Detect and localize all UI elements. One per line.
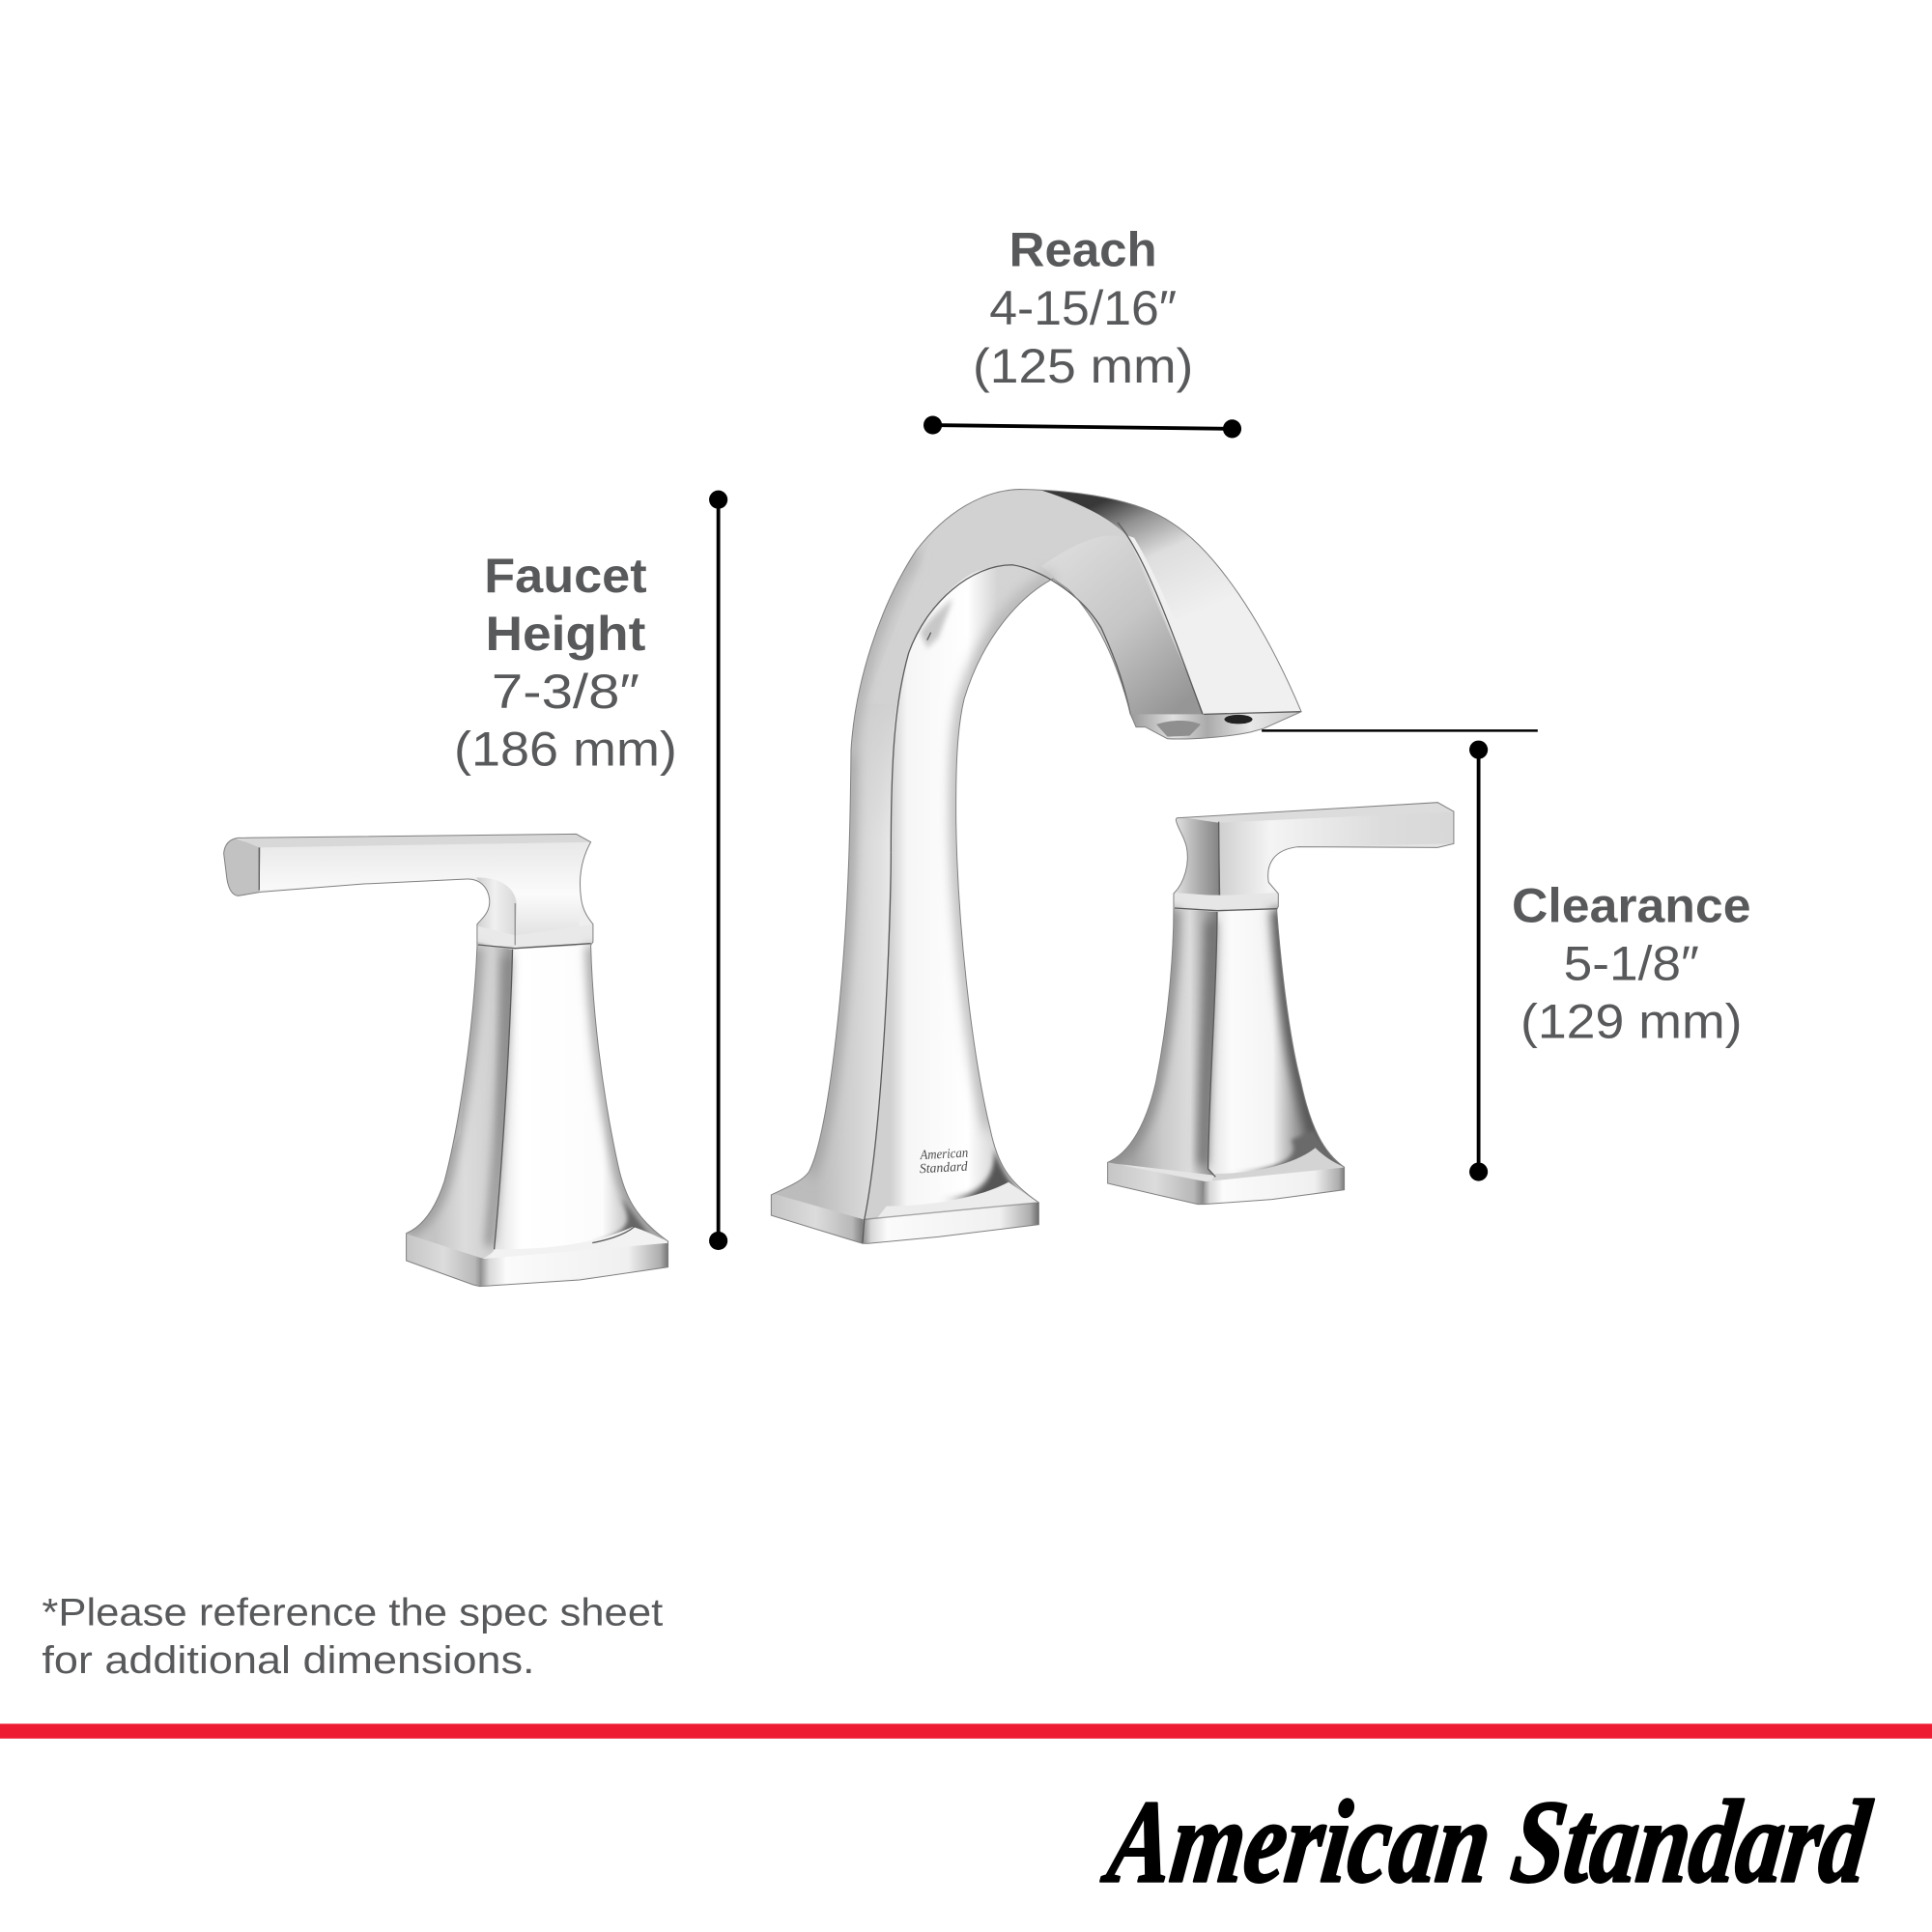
text block: footnote: *Please reference the spec sheet xyxy=(42,1591,663,1634)
heading: clearance dimension: 5-1/8″ xyxy=(1564,937,1699,991)
icon: left handle xyxy=(222,834,669,1288)
heading: faucet height dimension: 7-3/8″ xyxy=(492,665,639,719)
icon: small brand mark on spout: American xyxy=(919,1146,969,1163)
arrow: reach dimension line xyxy=(923,415,1241,438)
heading: clearance dimension: (129 mm) xyxy=(1520,995,1743,1049)
text block: footnote xyxy=(42,1591,663,1682)
heading: faucet height dimension: (186 mm) xyxy=(454,723,677,777)
icon: small brand mark on spout xyxy=(919,1146,969,1177)
heading: clearance dimension: Clearance xyxy=(1512,879,1750,933)
heading: reach dimension xyxy=(973,223,1193,393)
heading: faucet height dimension: Faucet xyxy=(484,549,647,603)
heading: reach dimension: (125 mm) xyxy=(973,339,1193,393)
heading: clearance dimension xyxy=(1512,879,1750,1049)
red divider bar xyxy=(0,1723,1932,1739)
heading: faucet height dimension: Height xyxy=(486,607,645,661)
arrow: clearance reference line from spout xyxy=(1262,729,1538,731)
heading: reach dimension: Reach xyxy=(1009,223,1157,277)
arrow: faucet height dimension line xyxy=(709,491,727,1250)
heading: faucet height dimension xyxy=(454,549,677,777)
text block: footnote: for additional dimensions. xyxy=(42,1639,535,1682)
icon: small brand mark on spout: Standard xyxy=(920,1159,969,1177)
icon: spout body xyxy=(768,486,1301,1246)
icon: right handle xyxy=(1104,802,1456,1206)
heading: reach dimension: 4-15/16″ xyxy=(989,281,1177,335)
arrow: clearance dimension line xyxy=(1469,741,1488,1181)
